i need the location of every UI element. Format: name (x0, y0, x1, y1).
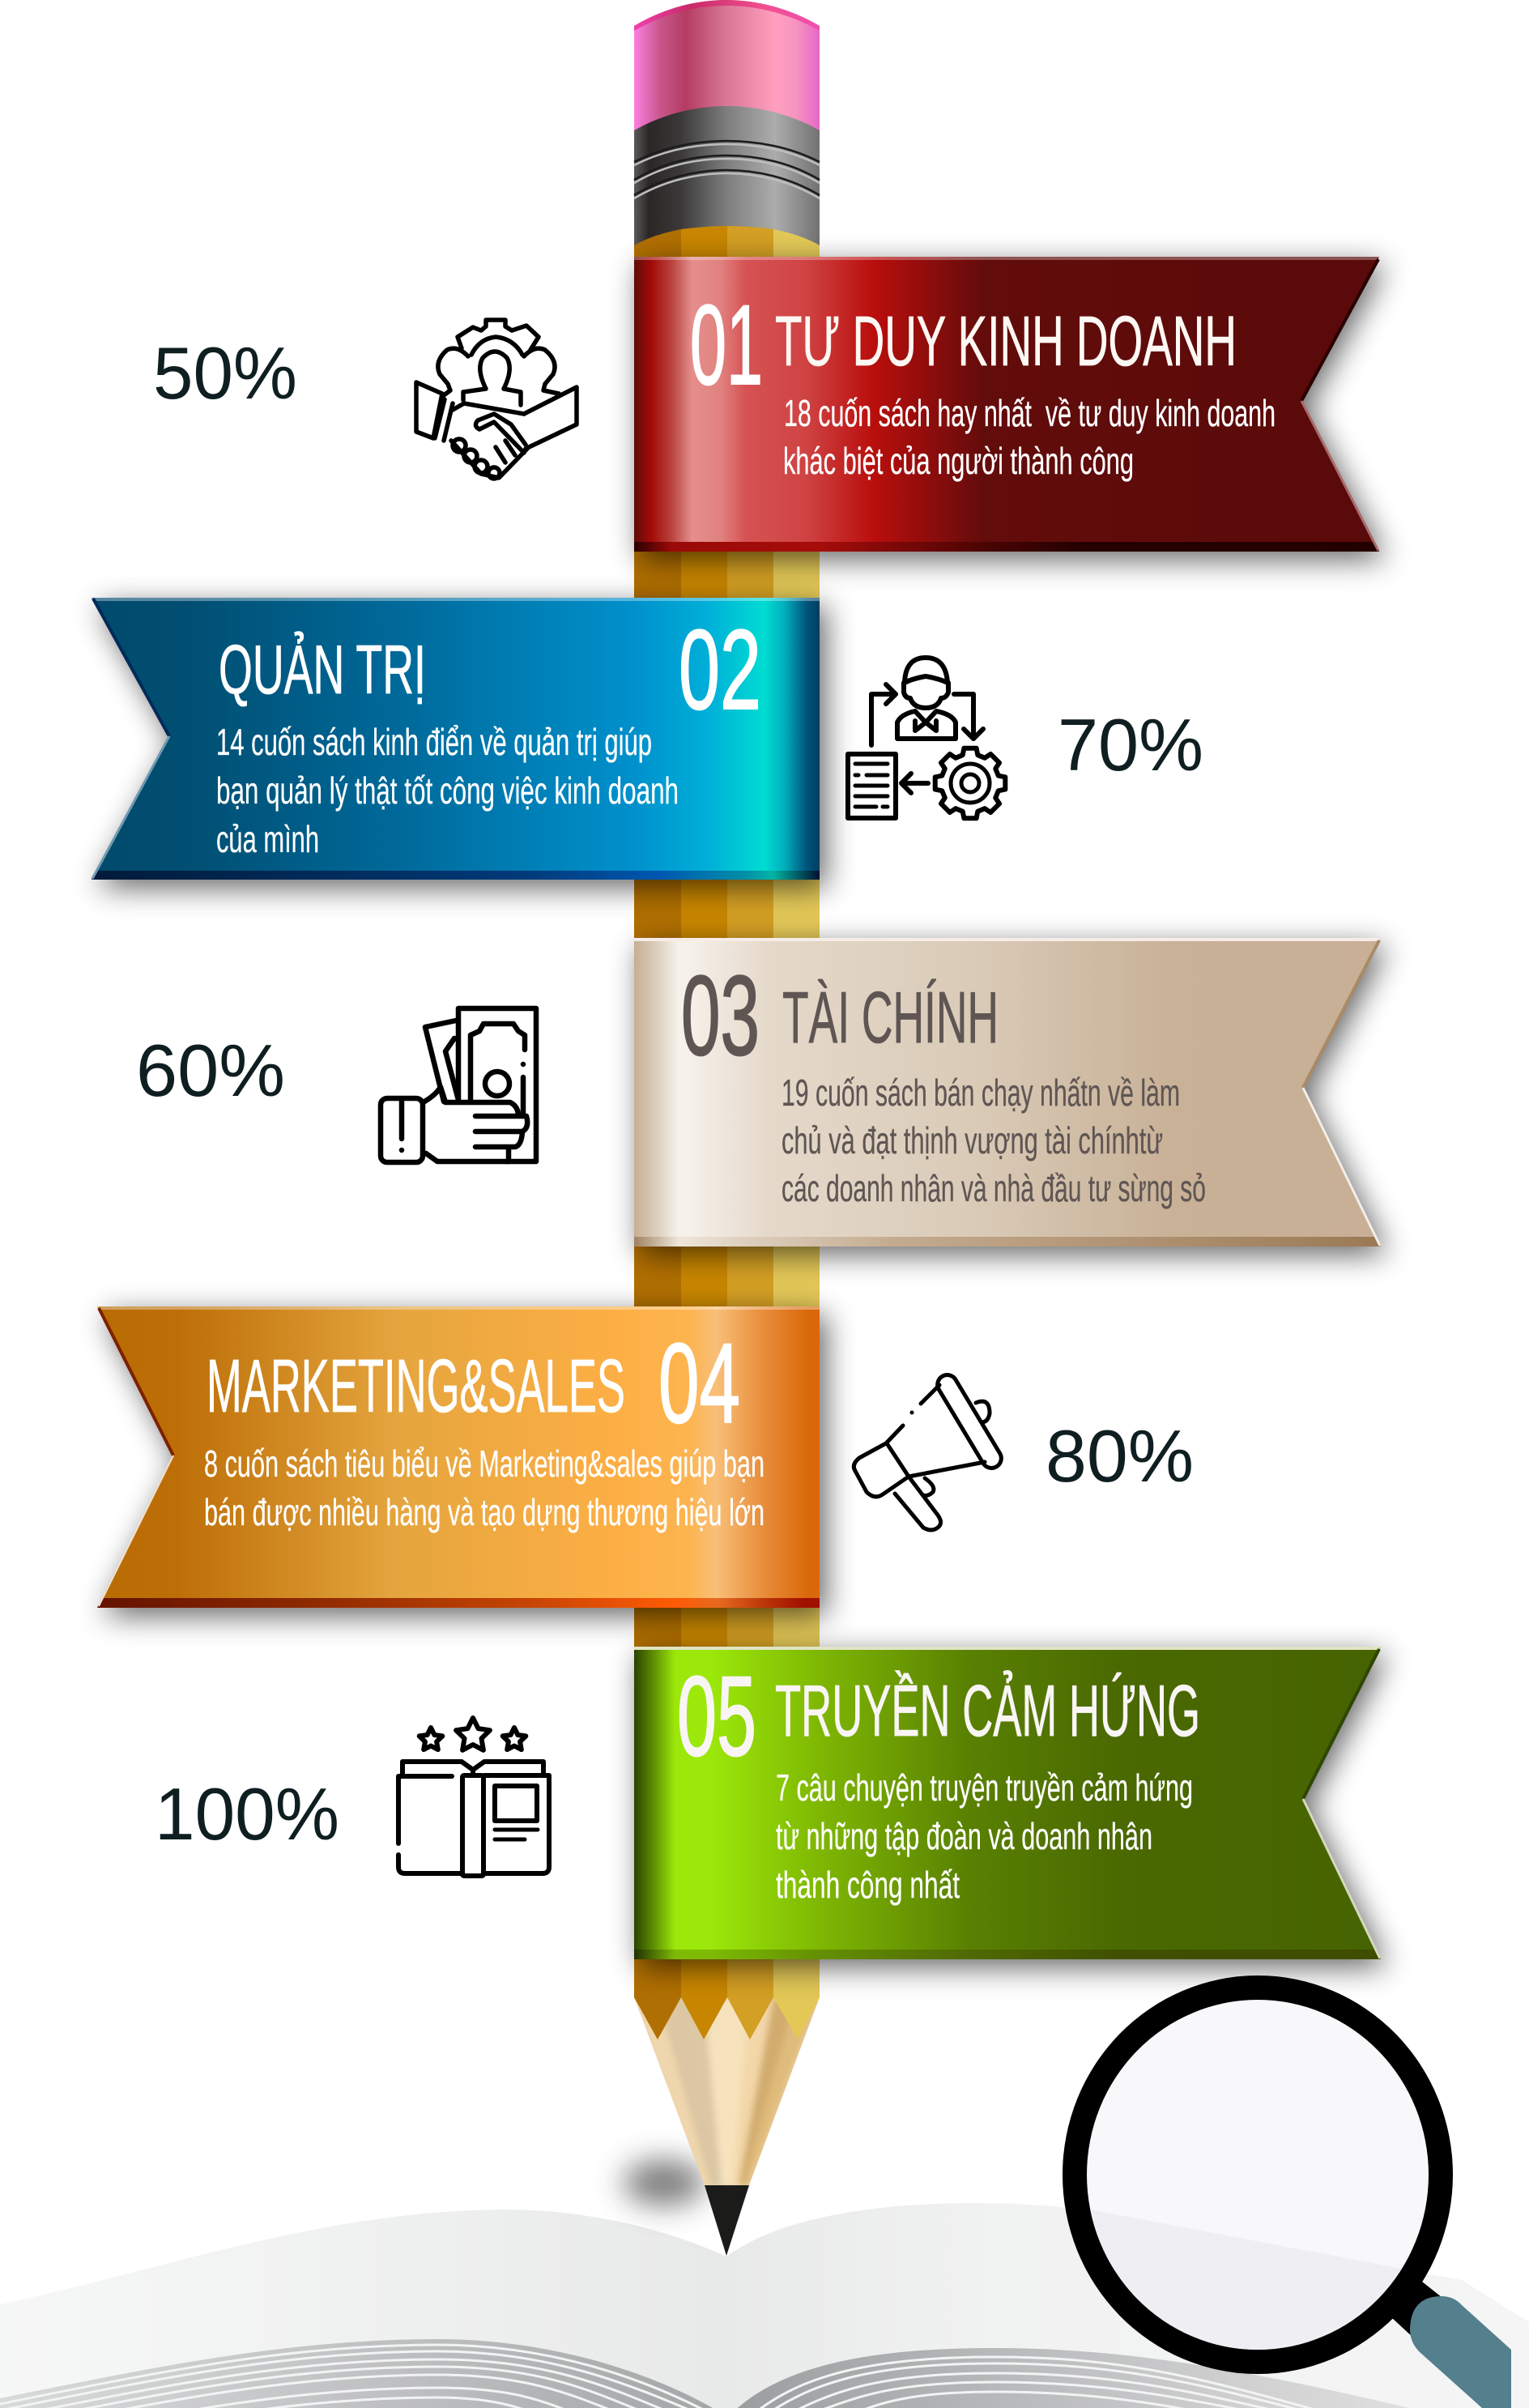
description (776, 1767, 1193, 1906)
heading: TƯ DUY KINH DOANH (775, 302, 1237, 381)
description: bạn quản lý thật tốt công việc kinh doanh (216, 769, 679, 812)
description: bán được nhiều hàng và tạo dựng thương hiệu lớn (204, 1491, 764, 1533)
magnifier neck (1377, 2282, 1446, 2338)
pencil eraser (634, 0, 820, 130)
description (782, 1072, 1206, 1209)
magnifier lens and frame (1063, 1975, 1453, 2374)
magnifying glass (1053, 1975, 1511, 2408)
pencil body stripes (634, 226, 820, 2039)
description (204, 1443, 764, 1533)
description: thành công nhất (776, 1864, 960, 1906)
description: 7 câu chuyện truyện truyền cảm hứng (776, 1767, 1193, 1809)
pencil sharpened wood cone (632, 1992, 823, 2189)
percentage 100%: 100% (155, 1774, 339, 1856)
number 02: 02 (679, 606, 761, 733)
heading: MARKETING&SALES (207, 1344, 625, 1428)
heading: TRUYỀN CẢM HỨNG (775, 1669, 1200, 1752)
heading: TÀI CHÍNH (782, 978, 999, 1059)
banner 04: marketing & sales (97, 1306, 820, 1608)
banner 03: tài chính (634, 938, 1381, 1247)
open book (0, 2203, 1529, 2408)
heading: QUẢN TRỊ (219, 631, 426, 709)
pencil ferrule (634, 106, 820, 259)
banner 02: quản trị (92, 598, 820, 880)
description (783, 392, 1276, 482)
description: 14 cuốn sách kinh điển về quản trị giúp (216, 721, 652, 763)
description: các doanh nhân và nhà đầu tư sừng sỏ (782, 1167, 1206, 1209)
magnifier handle (1410, 2296, 1511, 2408)
icon: person, gear and document cycle (848, 658, 1005, 818)
description: 19 cuốn sách bán chạy nhấtn về làm (782, 1072, 1180, 1114)
percentage 70%: 70% (1058, 705, 1203, 786)
percentage 50%: 50% (153, 333, 297, 415)
icon: hand holding money (381, 1008, 536, 1162)
description: khác biệt của người thành công (783, 440, 1134, 482)
number 04: 04 (658, 1319, 740, 1447)
description (216, 721, 679, 860)
icon: open book with three stars (398, 1718, 549, 1876)
percentage 60%: 60% (136, 1030, 285, 1112)
number 03: 03 (681, 952, 760, 1079)
description: của mình (216, 818, 319, 860)
number 05: 05 (677, 1652, 756, 1779)
description: 18 cuốn sách hay nhất về tư duy kinh doanh (784, 392, 1276, 434)
pencil lead tip (705, 2185, 749, 2256)
description: chủ và đạt thịnh vượng tài chínhtừ (782, 1119, 1163, 1161)
banner 01: tư duy kinh doanh (634, 257, 1379, 552)
description: 8 cuốn sách tiêu biểu về Marketing&sales giúp bạn (204, 1443, 764, 1485)
pencil (632, 0, 823, 2256)
icon: team and handshake (416, 320, 577, 479)
banner 05: truyền cảm hứng (634, 1647, 1381, 1959)
number 01: 01 (690, 281, 763, 408)
description: từ những tập đoàn và doanh nhân (776, 1815, 1152, 1857)
icon: megaphone (854, 1371, 1005, 1530)
percentage 80%: 80% (1046, 1416, 1194, 1498)
